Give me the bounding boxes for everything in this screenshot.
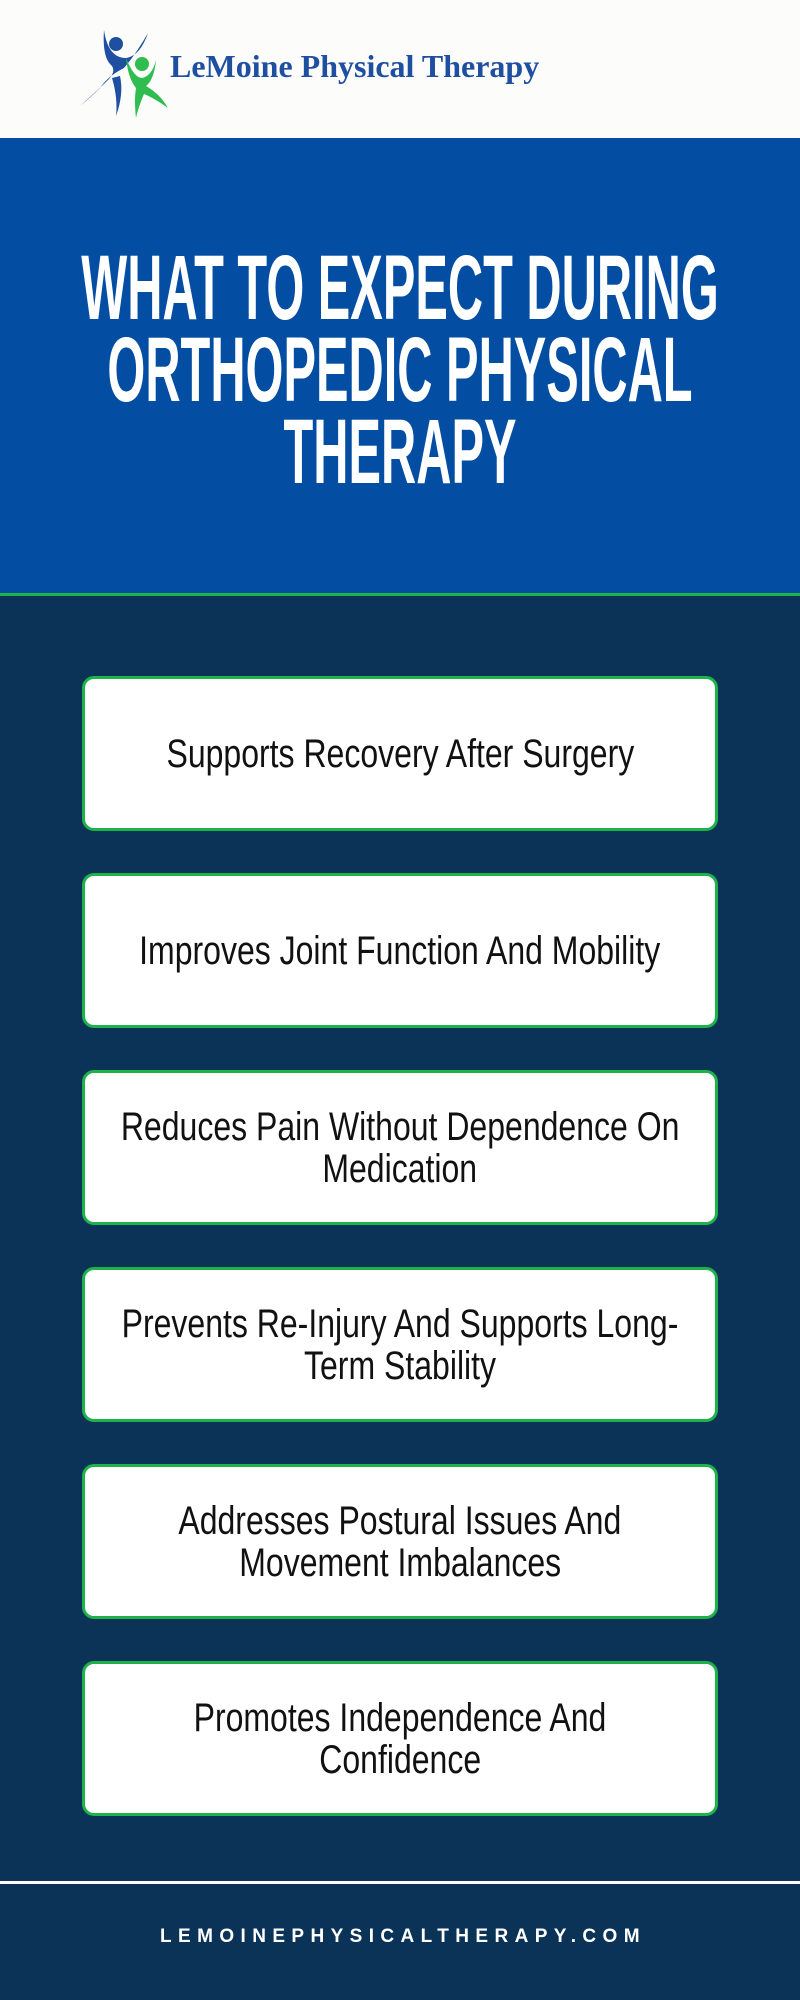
box 5: Addresses Postural Issues And xyxy=(179,1498,621,1542)
box 6 xyxy=(82,1661,718,1816)
title xyxy=(81,247,719,493)
box 4 xyxy=(82,1267,718,1422)
footer url: LEMOINEPHYSICALTHERAPY.COM xyxy=(160,1926,646,1947)
box 2: Improves Joint Function And Mobility xyxy=(139,928,661,972)
title: ORTHOPEDIC PHYSICAL xyxy=(107,319,693,421)
box 3 xyxy=(82,1070,718,1225)
box 2 xyxy=(82,873,718,1028)
box 5: Movement Imbalances xyxy=(239,1540,561,1584)
box 3: Reduces Pain Without Dependence On xyxy=(121,1104,679,1148)
box 1 xyxy=(82,676,718,831)
box 4: Prevents Re-Injury And Supports Long- xyxy=(122,1302,678,1346)
logo text: LeMoine Physical Therapy xyxy=(170,48,539,84)
box 1: Supports Recovery After Surgery xyxy=(166,732,634,776)
box 4: Term Stability xyxy=(304,1344,496,1388)
title band xyxy=(0,138,800,596)
header xyxy=(0,0,800,138)
box 5 xyxy=(82,1464,718,1619)
logo xyxy=(80,30,539,118)
icon: figures xyxy=(80,30,168,118)
box 3: Medication xyxy=(323,1146,477,1190)
box 6: Promotes Independence And xyxy=(194,1696,606,1740)
box 6: Confidence xyxy=(319,1738,481,1782)
